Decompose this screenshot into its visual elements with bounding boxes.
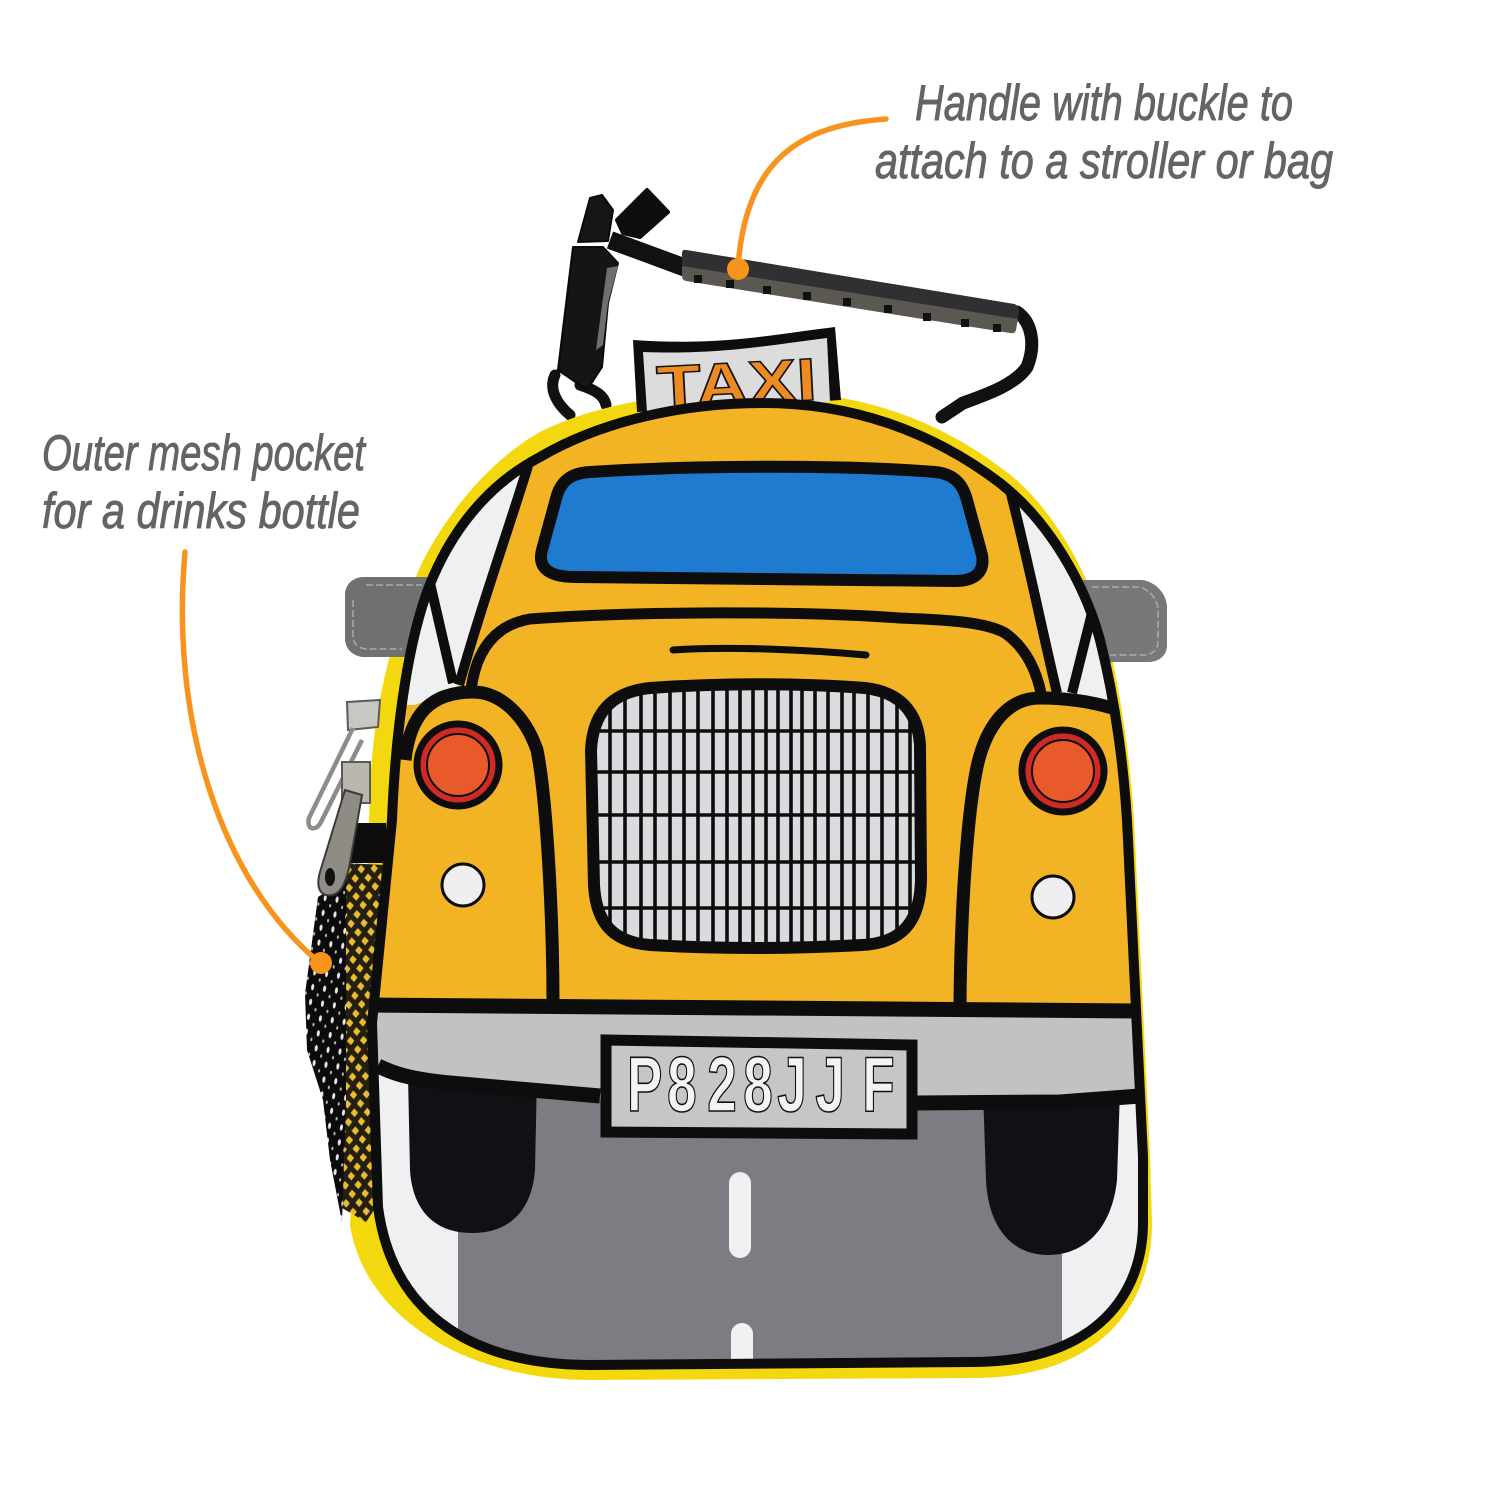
left side window <box>406 475 520 705</box>
caption: handle with buckle: Handle with buckle to <box>915 75 1293 131</box>
bumper lines <box>370 1005 1140 1011</box>
outer mesh pocket <box>305 823 386 1222</box>
caption: handle with buckle <box>875 75 1333 189</box>
taxi roof sign <box>633 327 841 421</box>
right wing mirror <box>1082 580 1167 662</box>
zipper pulls <box>308 700 380 895</box>
left tail light <box>417 724 499 806</box>
pocket binding <box>346 823 386 863</box>
orange arrow to mesh pocket <box>182 552 332 974</box>
cord: right loop <box>942 312 1032 417</box>
sign text: TAXI <box>655 346 818 421</box>
black mesh <box>305 880 346 1222</box>
yellow body <box>360 395 1160 1010</box>
left fender <box>405 692 553 1003</box>
strap tail <box>617 190 668 237</box>
right tail light <box>1022 730 1104 812</box>
bag artwork <box>360 395 1160 1375</box>
plate number: P828JJF <box>627 1042 895 1129</box>
right side window <box>1019 506 1108 700</box>
grille <box>590 684 925 950</box>
rod <box>682 250 1019 333</box>
road <box>458 1095 1062 1370</box>
yellow mesh <box>338 863 384 1222</box>
yellow zip edge of bag <box>350 391 1152 1380</box>
left tyre <box>408 1075 537 1233</box>
rod holes <box>694 275 1001 332</box>
cord: buckle to rod <box>610 240 686 268</box>
handle with buckle and cord <box>553 190 1032 417</box>
left wing mirror <box>345 577 430 657</box>
cord: left loop <box>553 375 606 415</box>
roof pillar lines <box>430 466 1092 693</box>
left reflector <box>442 864 484 906</box>
orange arrow to handle <box>727 119 886 280</box>
licence plate <box>606 1040 912 1134</box>
rear window <box>541 467 983 581</box>
boot line <box>673 648 866 655</box>
caption: outer mesh pocket <box>42 425 367 539</box>
bumper <box>370 1007 1140 1100</box>
road centre line <box>729 1183 751 1247</box>
right fender <box>960 698 1112 1003</box>
caption: handle with buckle: attach to a stroller or bag <box>875 133 1333 189</box>
black piping around bag <box>372 403 1143 1365</box>
caption: outer mesh pocket: for a drinks bottle <box>42 483 360 539</box>
buckle <box>558 195 618 390</box>
right reflector <box>1032 876 1074 918</box>
page <box>43 83 1334 1380</box>
caption: outer mesh pocket: Outer mesh pocket <box>42 425 367 481</box>
right tyre <box>983 1090 1120 1255</box>
road surround <box>378 1075 1138 1341</box>
boot panel outline <box>471 613 1041 693</box>
